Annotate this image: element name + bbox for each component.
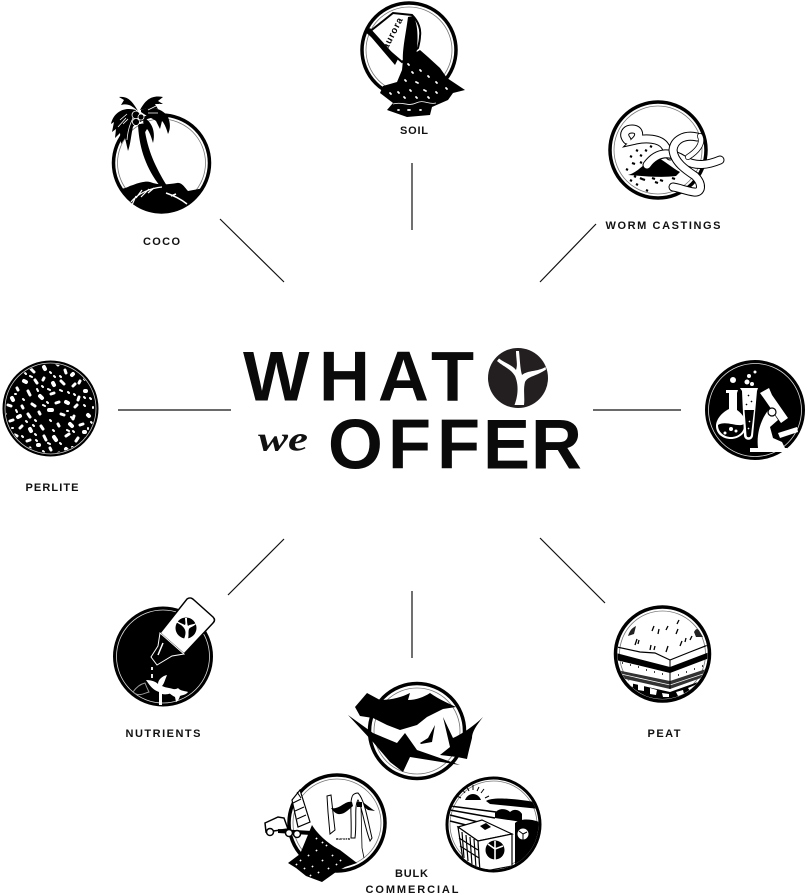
- icon: dump truck and bulk bags: [265, 775, 385, 882]
- panel: worm castings: [606, 102, 720, 232]
- label: BULK COMMERCIAL: BULK: [395, 868, 428, 880]
- label: WORM CASTINGS: WORM CASTINGS: [606, 220, 720, 232]
- logo: tree in circle: [488, 348, 548, 408]
- connector: perlite: [118, 409, 231, 411]
- panel: peat: [612, 607, 712, 740]
- icon: bats over moon: [348, 684, 483, 778]
- panel: soil: [362, 3, 465, 137]
- label: PERLITE: PERLITE: [26, 482, 78, 494]
- title word: we: we: [258, 420, 308, 458]
- connector: nutrients: [228, 539, 284, 595]
- icon: nutrient bottle: [114, 598, 214, 706]
- icon: worms: [610, 102, 720, 198]
- label: COCO: COCO: [143, 236, 180, 248]
- connector: coco: [220, 219, 284, 282]
- icon: perlite: [4, 362, 98, 456]
- panel: coco: [111, 97, 210, 248]
- label: PEAT: PEAT: [648, 728, 681, 740]
- label: SOIL: SOIL: [400, 125, 428, 137]
- connector: worm castings: [540, 224, 596, 282]
- icon: palm tree: [111, 97, 210, 214]
- icon: dump truck and bulk bags: aurora: [336, 836, 351, 841]
- icon: soil bag pouring: aurora: [380, 15, 406, 51]
- icon: soil layers: [612, 607, 712, 702]
- label: NUTRIENTS: NUTRIENTS: [126, 728, 200, 740]
- icon: factory with rooftop crops: [447, 778, 545, 875]
- title line: WHAT: WHAT: [243, 336, 474, 416]
- connector: bulk commercial: [411, 591, 413, 658]
- connector: soil: [411, 163, 413, 230]
- panel: nutrients: [114, 598, 214, 740]
- panel: perlite: [4, 362, 98, 494]
- title line: OFFER: OFFER: [328, 404, 582, 484]
- icon: flask and microscope: [706, 361, 804, 459]
- title: [243, 336, 582, 484]
- connector: peat: [540, 538, 605, 603]
- connector: science: [593, 409, 681, 411]
- panel: bulk commercial: [265, 684, 545, 895]
- panel: science: [706, 361, 804, 459]
- label: BULK COMMERCIAL: [366, 868, 459, 895]
